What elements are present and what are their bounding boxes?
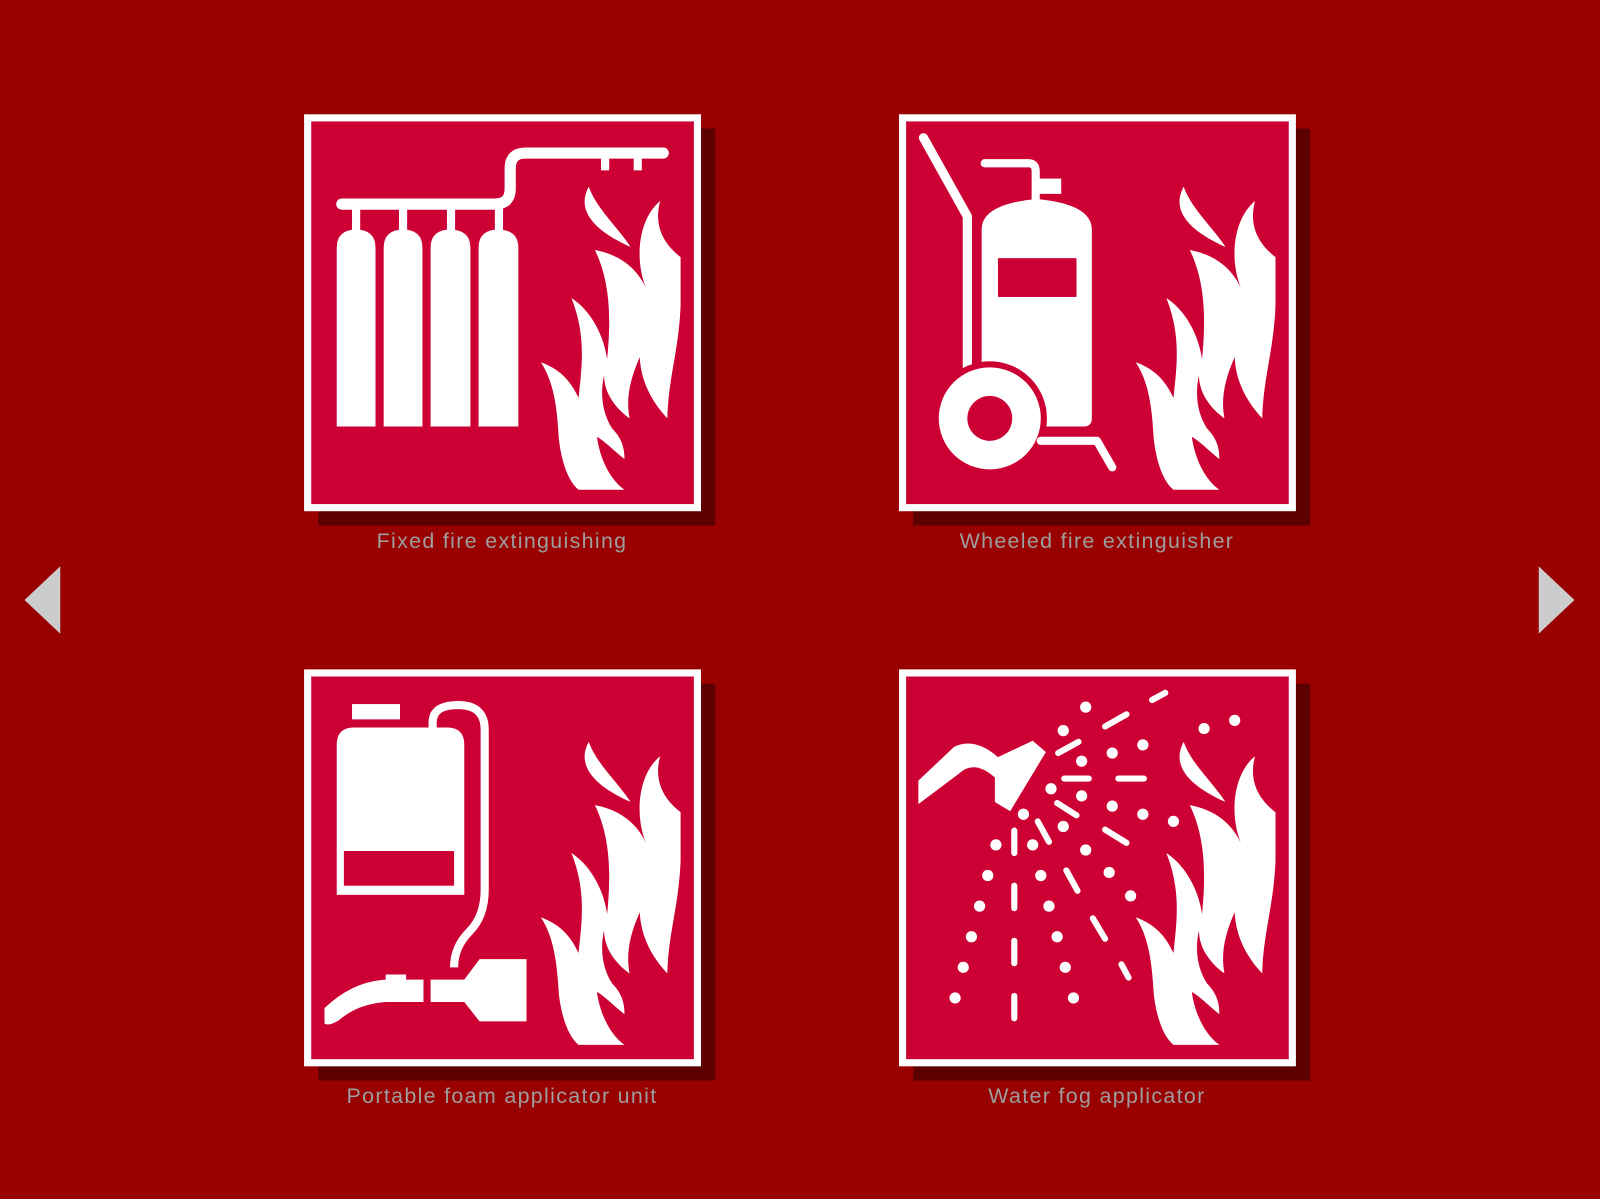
icon: gas cylinders with pipe (337, 153, 663, 427)
arrow: next (1539, 566, 1574, 634)
arrow: previous (24, 566, 60, 634)
panel: portable foam applicator unit (304, 669, 715, 1081)
label: fixed fire extinguishing: Fixed fire extinguishing (377, 529, 627, 553)
icon: fog nozzle (918, 741, 1046, 811)
panel: fixed fire extinguishing (304, 114, 715, 526)
panel: water fog applicator (899, 669, 1310, 1081)
icon: flames (541, 742, 681, 1045)
icon: water droplets (949, 702, 1240, 1004)
icon: foam tank and hose (324, 704, 527, 1024)
icon: wheeled extinguisher (923, 138, 1112, 476)
icon: flames (541, 187, 681, 490)
label: water fog applicator: Water fog applicator (988, 1084, 1206, 1108)
icon: flames (1136, 742, 1276, 1045)
label: wheeled fire extinguisher: Wheeled fire extinguisher (960, 529, 1234, 553)
icon: flames (1136, 187, 1276, 490)
panel: wheeled fire extinguisher (899, 114, 1310, 526)
label: portable foam applicator unit: Portable foam applicator unit (347, 1084, 658, 1108)
